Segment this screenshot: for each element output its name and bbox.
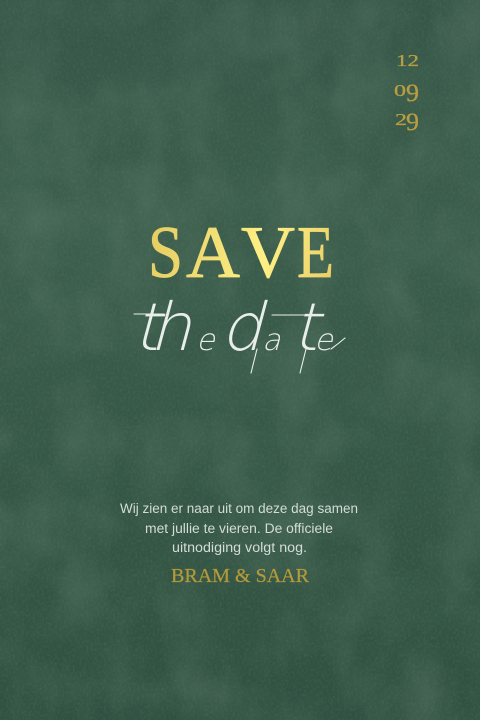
names: BRAM & SAAR: BRAM & SAAR [171, 565, 310, 587]
script heading: the date: e [194, 323, 222, 358]
message text: uitnodiging volgt nog. [172, 540, 307, 555]
date: 12 09 29: 0 [394, 81, 406, 100]
heading: SAVE: E [297, 212, 334, 294]
date: 12 09 29: 12 [396, 51, 419, 70]
script heading: the date: t [129, 289, 175, 366]
script heading: the date [129, 289, 349, 373]
date: 12 09 29 [394, 51, 419, 136]
message text [120, 501, 358, 555]
heading: SAVE: S [148, 212, 183, 294]
script heading: the date: a [260, 323, 288, 358]
script heading: the date: t [288, 289, 334, 366]
date: 12 09 29: 9 [406, 80, 419, 107]
script heading: the date: d [216, 289, 278, 366]
script heading: the date: e [312, 323, 340, 358]
date: 12 09 29: 9 [406, 109, 419, 136]
heading: SAVE: V [241, 212, 295, 294]
message text: met jullie te vieren. De officiele [145, 521, 333, 536]
heading: SAVE [148, 212, 334, 294]
heading: SAVE: A [186, 212, 240, 294]
message text: Wij zien er naar uit om deze dag samen [120, 501, 358, 516]
script heading: the date: h [145, 289, 207, 366]
pen flourishes [134, 314, 345, 373]
date: 12 09 29: 2 [395, 110, 407, 129]
